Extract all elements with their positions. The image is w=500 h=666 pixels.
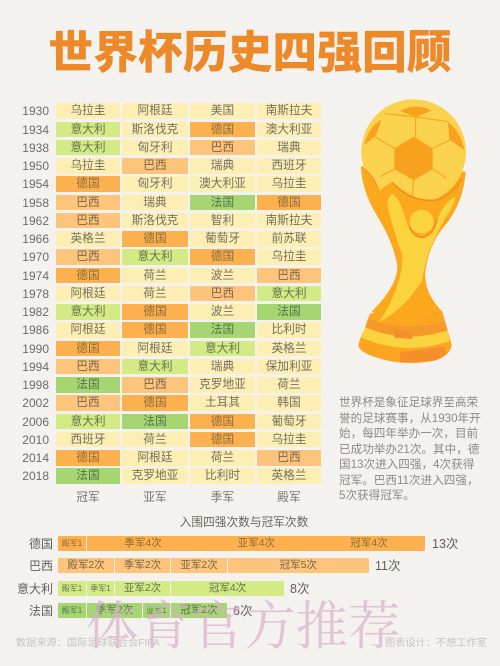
row 1930: 美国 <box>211 104 234 117</box>
row 1970: 意大利 <box>137 250 173 263</box>
row 1990: 1990 <box>22 342 49 356</box>
title: 世界杯历史四强回顾 <box>48 28 452 78</box>
row 1934: 澳大利亚 <box>266 123 312 136</box>
bar: France: 冠军2次 <box>180 604 218 616</box>
row 1930: 1930 <box>22 104 49 118</box>
row 2014 <box>22 450 321 466</box>
trophy cup body <box>361 167 466 321</box>
row 1994: 瑞典 <box>211 360 234 373</box>
row 1986: 1986 <box>22 323 49 337</box>
row 2010: 乌拉圭 <box>271 433 307 446</box>
row 2006 <box>22 414 321 429</box>
row 2018: 比利时 <box>205 469 240 482</box>
row 1966: 1966 <box>22 232 49 246</box>
bar: Italy: 亚军2次 <box>124 582 161 594</box>
row 1978: 1978 <box>22 287 49 301</box>
row 2002: 巴西 <box>76 396 100 409</box>
row 2002: 德国 <box>143 396 167 409</box>
bar: Italy: 季军1 <box>90 584 111 593</box>
row 1966: 德国 <box>143 232 167 245</box>
row 1978: 意大利 <box>271 287 307 300</box>
row 2018 <box>22 468 321 484</box>
row 1970: 乌拉圭 <box>271 250 307 263</box>
row 1930 <box>22 103 321 119</box>
row 2002 <box>22 395 321 411</box>
bar: France: 法国 <box>29 604 53 618</box>
row 1962: 智利 <box>211 214 234 227</box>
column headers: 殿军 <box>277 491 301 504</box>
row 1930: 南斯拉夫 <box>266 104 312 117</box>
description text block: 冠军。巴西11次进入四强， <box>339 474 479 487</box>
row 1998: 荷兰 <box>277 378 301 391</box>
row 2014: 荷兰 <box>211 451 234 464</box>
column headers <box>76 490 301 504</box>
row 2018: 英格兰 <box>271 469 307 482</box>
row 1994: 1994 <box>22 360 49 374</box>
row 1982: 意大利 <box>70 305 106 318</box>
row 1970 <box>22 249 321 265</box>
row 2018: 2018 <box>22 469 49 483</box>
row 2006: 2006 <box>22 415 49 429</box>
row 1978: 巴西 <box>211 287 234 300</box>
row 1954: 澳大利亚 <box>199 177 246 190</box>
bar: Germany: 德国 <box>29 537 53 551</box>
row 2018: 克罗地亚 <box>132 469 178 482</box>
row 2006: 葡萄牙 <box>271 415 307 428</box>
bar: Italy <box>17 581 309 596</box>
figure <box>379 194 456 322</box>
row 1934: 意大利 <box>70 123 106 136</box>
row 1986: 比利时 <box>271 323 307 336</box>
bar: Italy: 意大利 <box>17 582 53 596</box>
description text block: 始，每四年举办一次，目前 <box>339 427 478 440</box>
row 2014: 巴西 <box>277 451 301 464</box>
row 1998: 法国 <box>76 378 100 391</box>
bar: Brazil: 冠军5次 <box>280 559 317 571</box>
row 1982: 法国 <box>277 305 301 318</box>
row 1934: 斯洛伐克 <box>132 123 178 136</box>
design credit: 图表设计：不想工作室 <box>385 638 487 649</box>
bar chart: semifinal appearances <box>17 536 458 618</box>
bar: Germany: 亚军4次 <box>238 537 275 549</box>
row 1938: 瑞典 <box>277 141 301 154</box>
bar: Brazil <box>29 558 400 573</box>
row 2006: 法国 <box>143 415 167 428</box>
bar: France <box>29 603 252 618</box>
row 1934: 1934 <box>22 123 49 137</box>
row 2010: 德国 <box>211 433 234 446</box>
row 1934 <box>22 122 321 137</box>
bar: Brazil: 巴西 <box>29 559 53 573</box>
column headers: 季军 <box>211 491 234 504</box>
description text block: 世界杯是象征足球界至高荣 <box>339 396 478 409</box>
row 1954: 匈牙利 <box>137 177 173 190</box>
column headers: 冠军 <box>76 491 100 504</box>
row 1970: 德国 <box>211 250 234 263</box>
bar: Germany: 季军4次 <box>124 537 162 549</box>
bar: Germany: 冠军4次 <box>350 537 388 549</box>
row 1966 <box>22 231 321 247</box>
row 2010: 2010 <box>22 433 49 447</box>
football <box>361 99 466 204</box>
row 1954 <box>22 176 321 192</box>
row 1962: 巴西 <box>76 214 100 227</box>
row 1986 <box>22 322 321 338</box>
row 1934: 德国 <box>211 123 234 136</box>
cup rim <box>361 167 466 268</box>
row 1998: 克罗地亚 <box>199 378 246 391</box>
row 1998: 巴西 <box>143 378 167 391</box>
row 1974: 波兰 <box>211 269 234 282</box>
row 1994: 巴西 <box>76 360 100 373</box>
column headers: 亚军 <box>143 491 167 504</box>
row 1954: 德国 <box>76 177 100 190</box>
row 1986: 德国 <box>143 323 167 336</box>
row 1978: 阿根廷 <box>70 287 106 300</box>
row 1958 <box>22 195 321 210</box>
description text block <box>339 396 481 502</box>
row 1962 <box>22 213 321 228</box>
row 1966: 葡萄牙 <box>205 232 240 245</box>
description text block: 誉的足球赛事，从1930年开 <box>339 412 481 425</box>
row 1962: 斯洛伐克 <box>132 214 178 227</box>
row 1962: 南斯拉夫 <box>266 214 312 227</box>
row 1974: 1974 <box>22 269 49 283</box>
row 1974: 荷兰 <box>143 269 167 282</box>
figure head <box>409 210 437 237</box>
row 1974: 巴西 <box>277 269 301 282</box>
row 1954: 1954 <box>22 177 49 191</box>
row 2002: 韩国 <box>277 396 301 409</box>
row 1986: 阿根廷 <box>70 323 106 336</box>
bar: Brazil: 亚军2次 <box>180 559 218 571</box>
row 2014: 德国 <box>76 451 100 464</box>
bar: Italy: 殿军1 <box>62 584 82 593</box>
row 2002: 土耳其 <box>205 396 240 409</box>
row 1950: 瑞典 <box>211 159 234 172</box>
row 2014: 2014 <box>22 451 49 465</box>
row 1994: 意大利 <box>137 360 173 373</box>
row 1958: 德国 <box>277 196 301 209</box>
data source note: 数据来源：国际足球联合会FIFA <box>16 638 160 649</box>
row 1990: 意大利 <box>205 342 240 355</box>
watermark: 体育官方推荐 <box>86 598 400 656</box>
description text block: 已成功举办21次。其中，德 <box>339 443 479 456</box>
row 1990: 德国 <box>76 342 100 355</box>
row 1978: 荷兰 <box>143 287 167 300</box>
row 1982 <box>22 304 321 320</box>
row 1930: 乌拉圭 <box>70 104 106 117</box>
bar chart title: 入围四强次数与冠军次数 <box>180 516 308 529</box>
bar: Germany <box>29 536 458 551</box>
row 1958: 法国 <box>211 196 234 209</box>
table: semifinalists by year <box>22 103 321 504</box>
row 1958: 瑞典 <box>143 196 167 209</box>
row 1950 <box>22 158 321 174</box>
row 1938: 1938 <box>22 141 49 155</box>
row 1990 <box>22 341 321 356</box>
bar: Brazil: 11次 <box>375 559 400 573</box>
row 1974 <box>22 268 321 283</box>
bar: France: 亚军1 <box>146 606 167 615</box>
bar: France: 殿军1 <box>62 606 82 615</box>
row 1978 <box>22 286 321 301</box>
row 1962: 1962 <box>22 214 49 228</box>
row 1966: 英格兰 <box>70 232 106 245</box>
row 1958: 巴西 <box>76 196 100 209</box>
row 2010 <box>22 432 321 447</box>
row 1950: 1950 <box>22 159 49 173</box>
bar: Italy: 8次 <box>290 582 309 596</box>
row 2010: 西班牙 <box>70 433 106 446</box>
row 1974: 德国 <box>76 269 100 282</box>
row 1982: 1982 <box>22 305 49 319</box>
row 1950: 乌拉圭 <box>70 159 106 172</box>
row 1986: 法国 <box>211 323 234 336</box>
row 1994: 保加利亚 <box>266 360 312 373</box>
row 1950: 西班牙 <box>271 159 307 172</box>
row 1970: 巴西 <box>76 250 100 263</box>
row 1990: 阿根廷 <box>137 342 173 355</box>
row 2010: 荷兰 <box>143 433 167 446</box>
bar: Brazil: 殿军2次 <box>67 559 105 571</box>
row 2014: 阿根廷 <box>137 451 173 464</box>
row 1938: 匈牙利 <box>137 141 173 154</box>
description text block: 国13次进入四强，4次获得 <box>339 458 474 471</box>
row 1958: 1958 <box>22 196 49 210</box>
row 1954: 乌拉圭 <box>271 177 307 190</box>
icon: golden trophy with football <box>358 99 466 364</box>
row 1994 <box>22 359 321 374</box>
row 1998 <box>22 377 321 393</box>
row 1930: 阿根廷 <box>137 104 173 117</box>
row 1998: 1998 <box>22 378 49 392</box>
bar: Brazil: 季军2次 <box>124 559 161 571</box>
row 2002: 2002 <box>22 396 49 410</box>
row 1966: 前苏联 <box>271 232 307 245</box>
trophy base <box>358 312 452 363</box>
bar: France: 季军2次 <box>96 604 133 616</box>
row 1938: 巴西 <box>211 141 234 154</box>
row 1982: 德国 <box>143 305 167 318</box>
row 1990: 英格兰 <box>271 342 307 355</box>
row 1950: 巴西 <box>143 159 167 172</box>
row 2006: 德国 <box>211 415 234 428</box>
row 1938 <box>22 140 321 155</box>
row 1938: 意大利 <box>70 141 106 154</box>
row 2018: 法国 <box>76 469 100 482</box>
bar: Germany: 13次 <box>432 537 458 551</box>
bar: France: 6次 <box>233 604 252 618</box>
row 1982: 波兰 <box>211 305 234 318</box>
description text block: 5次获得冠军。 <box>339 489 415 502</box>
row 2006: 意大利 <box>70 415 106 428</box>
bar: Italy: 冠军4次 <box>209 582 246 594</box>
bar: Germany: 殿军1 <box>62 539 82 548</box>
row 1970: 1970 <box>22 250 49 264</box>
